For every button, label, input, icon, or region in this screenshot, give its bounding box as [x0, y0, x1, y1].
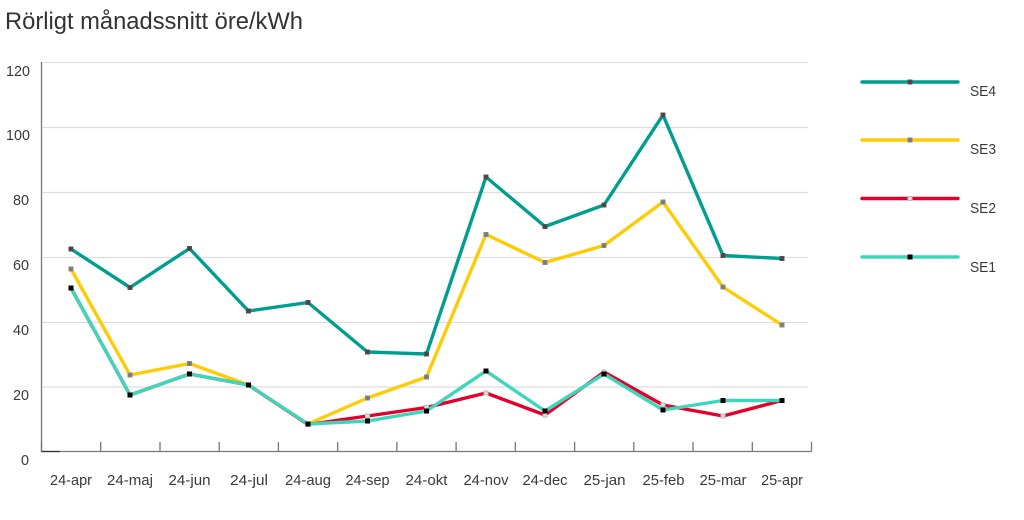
x axis labels: 25-feb [642, 472, 684, 489]
legend item: SE4 [862, 80, 996, 100]
y axis labels: 60 [13, 257, 29, 274]
x axis labels: 25-apr [761, 472, 803, 489]
legend item: SE2: SE2 [970, 200, 996, 217]
x axis labels: 24-jun [168, 472, 210, 489]
x axis labels: 25-mar [700, 472, 747, 489]
y axis labels [6, 63, 30, 469]
y axis labels: 120 [6, 63, 30, 80]
axes and tick marks [42, 62, 812, 452]
x axis labels: 24-apr [50, 472, 92, 489]
series SE1 [69, 286, 784, 426]
title: Rörligt månadssnitt öre/kWh [5, 8, 303, 35]
x axis labels: 24-nov [464, 472, 509, 489]
y axis labels: 40 [13, 322, 29, 339]
x axis labels: 24-maj [107, 472, 153, 489]
x axis labels [50, 472, 803, 489]
x axis labels: 24-dec [522, 472, 568, 489]
legend item: SE4: SE4 [970, 83, 996, 100]
legend item: SE3 [862, 138, 996, 158]
y axis labels: 20 [13, 387, 29, 404]
y axis labels: 0 [21, 452, 29, 469]
series SE2 [71, 288, 782, 426]
legend item: SE2 [862, 196, 996, 217]
x axis labels: 24-sep [346, 472, 390, 489]
x axis labels: 24-aug [285, 472, 331, 489]
legend item: SE3: SE3 [970, 141, 996, 158]
series SE4 [69, 113, 784, 356]
legend item: SE1 [862, 255, 996, 276]
y axis labels: 100 [6, 127, 30, 144]
x axis labels: 24-jul [230, 472, 268, 489]
legend [862, 80, 996, 276]
legend item: SE1: SE1 [970, 259, 996, 276]
series SE3 [69, 200, 784, 426]
x axis labels: 25-jan [584, 472, 626, 489]
x axis labels: 24-okt [406, 472, 448, 489]
y axis labels: 80 [13, 192, 29, 209]
